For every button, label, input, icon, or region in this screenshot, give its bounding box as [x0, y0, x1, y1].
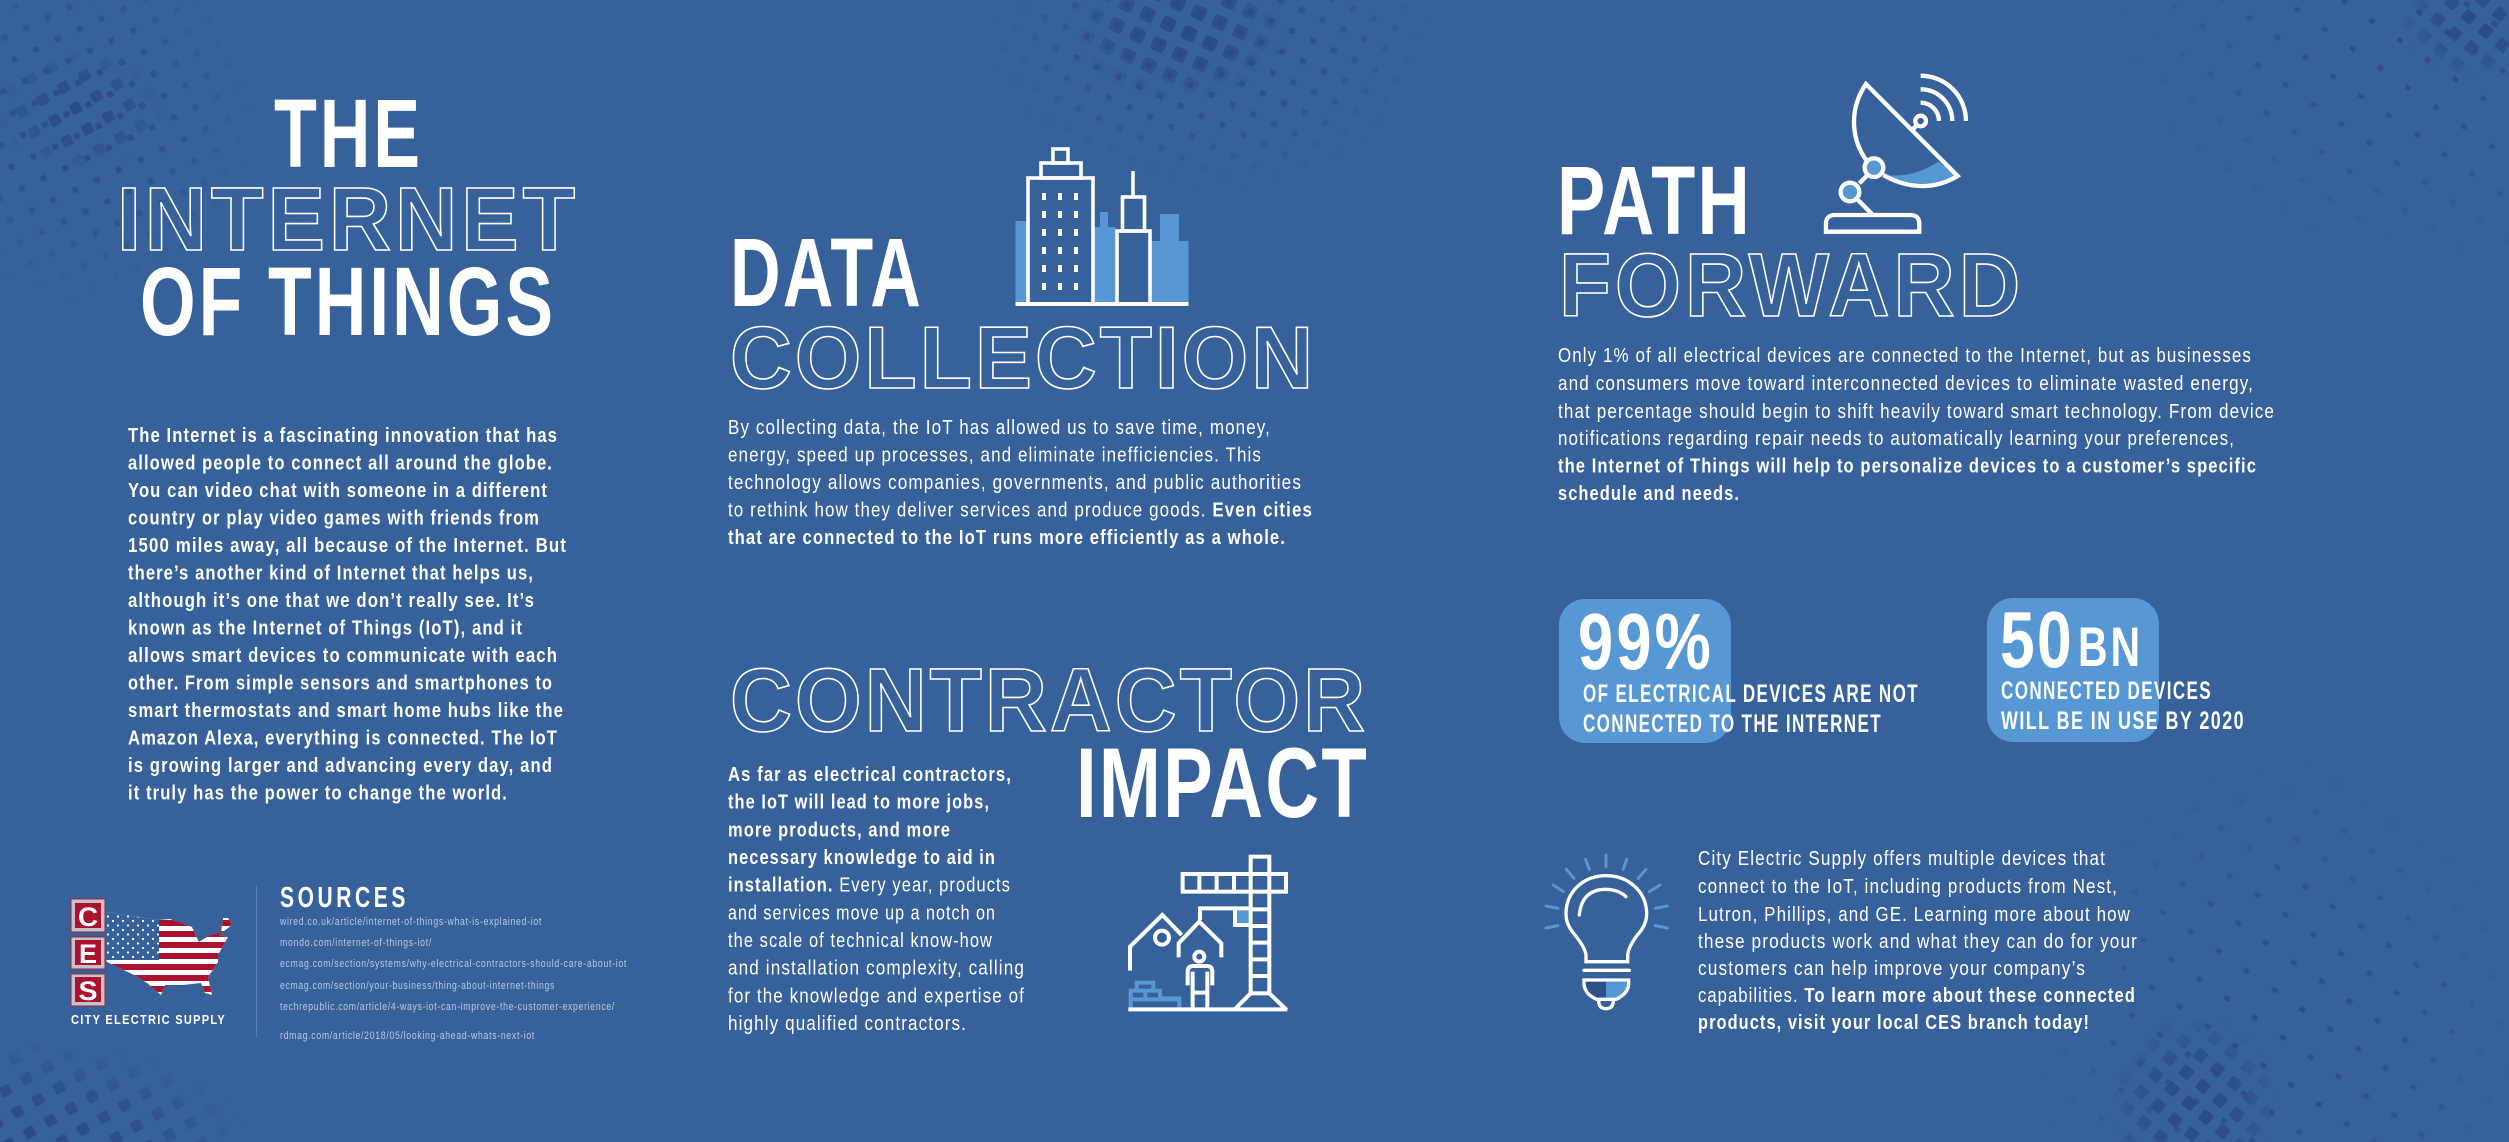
intro text block: is growing larger and advancing every day, and — [128, 755, 553, 777]
logo: City Electric Supply — [71, 899, 234, 1027]
intro text block: it truly has the power to change the world. — [128, 782, 508, 804]
title: The Internet of Things: OF THINGS — [140, 247, 556, 356]
sources list: techrepublic.com/article/4-ways-iot-can-improve-the-customer-experience/ — [280, 1001, 615, 1013]
logo letter E — [71, 937, 105, 969]
heading: Data Collection: COLLECTION — [730, 308, 1316, 407]
title: The Internet of Things: THE — [274, 79, 423, 188]
data collection text: energy, speed up processes, and eliminate inefficiencies. This — [728, 444, 1262, 466]
intro text block: other. From simple sensors and smartphones to — [128, 672, 553, 694]
icon: city skyline — [1016, 149, 1188, 306]
contractor text: more products, and more — [728, 819, 951, 841]
sources — [279, 882, 627, 1042]
stat caption — [2001, 677, 2245, 735]
CES offer text: products, visit your local CES branch today! — [1698, 1012, 2090, 1034]
path forward text: and consumers move toward interconnected devices to eliminate wasted energy, — [1558, 373, 2254, 395]
path forward text: Only 1% of all electrical devices are connected to the Internet, but as businesses — [1558, 345, 2252, 367]
sources list: mondo.com/internet-of-things-iot/ — [280, 937, 432, 949]
stat highlight box — [1559, 599, 1731, 743]
path forward text — [1558, 345, 2275, 505]
data collection text: technology allows companies, governments, and public authorities — [728, 472, 1302, 494]
logo letter C: C — [78, 902, 98, 932]
stat caption — [1583, 680, 1919, 738]
CES offer text: Lutron, Phillips, and GE. Learning more about how — [1698, 904, 2131, 926]
logo wordmark: CITY ELECTRIC SUPPLY — [71, 1013, 226, 1027]
stat highlight box — [1987, 598, 2159, 742]
intro text block: You can video chat with someone in a different — [128, 480, 548, 502]
heading: Contractor Impact: CONTRACTOR — [730, 651, 1368, 751]
CES offer text: City Electric Supply offers multiple devices that — [1698, 848, 2106, 870]
data collection text: By collecting data, the IoT has allowed us to save time, money, — [728, 417, 1271, 439]
intro text block: allowed people to connect all around the globe. — [128, 452, 553, 474]
title: The Internet of Things — [117, 79, 579, 356]
heading: Path Forward: PATH — [1557, 146, 1752, 255]
contractor text: As far as electrical contractors, — [728, 764, 1012, 786]
path forward text: the Internet of Things will help to personalize devices to a customer’s specific — [1558, 456, 2257, 478]
data collection text: to rethink how they deliver services and produce goods. Even cities — [728, 500, 1313, 522]
sources list: rdmag.com/article/2018/05/looking-ahead-whats-next-iot — [280, 1030, 535, 1042]
contractor text — [728, 764, 1025, 1035]
heading: Contractor Impact: IMPACT — [1076, 727, 1369, 838]
icon: satellite dish — [1826, 76, 1966, 232]
contractor text: necessary knowledge to aid in — [728, 847, 996, 869]
sources list — [279, 916, 627, 1042]
path forward text: notifications regarding repair needs to automatically learning your preferences, — [1558, 428, 2235, 450]
logo letter E: E — [79, 939, 97, 969]
contractor text: and services move up a notch on — [728, 902, 996, 924]
sources heading: SOURCES — [280, 882, 409, 914]
data collection text: that are connected to the IoT runs more efficiently as a whole. — [728, 527, 1286, 549]
heading: Data Collection — [730, 218, 1316, 407]
CES offer text: these products work and what they can do for your — [1698, 931, 2138, 953]
path forward text: that percentage should begin to shift heavily toward smart technology. From device — [1558, 401, 2275, 423]
logo letter C — [71, 899, 105, 932]
logo letter S — [71, 974, 105, 1006]
heading: Contractor Impact — [730, 651, 1369, 838]
CES offer text: capabilities. To learn more about these connected — [1698, 985, 2136, 1007]
heading: Path Forward — [1557, 146, 2024, 336]
intro text block: there’s another kind of Internet that helps us, — [128, 562, 534, 584]
sources list: ecmag.com/section/your-business/thing-about-internet-things — [280, 980, 555, 992]
intro text block: 1500 miles away, all because of the Internet. But — [128, 535, 567, 557]
heading: Data Collection: DATA — [730, 218, 923, 327]
stat caption: CONNECTED DEVICES — [2001, 677, 2212, 705]
title: The Internet of Things: INTERNET — [117, 170, 579, 270]
contractor text: highly qualified contractors. — [728, 1013, 967, 1035]
data collection text — [728, 417, 1313, 549]
stat: 50BN — [1987, 595, 2245, 742]
icon: US flag map — [102, 912, 232, 995]
intro text block: although it’s one that we don’t really see. It’s — [128, 590, 535, 612]
logo letter S: S — [78, 976, 98, 1006]
contractor text: installation. Every year, products — [728, 875, 1011, 897]
stat number: 50 — [2000, 595, 2074, 684]
stat caption: WILL BE IN USE BY 2020 — [2001, 707, 2245, 735]
intro text block: allows smart devices to communicate with each — [128, 645, 558, 667]
stat caption: CONNECTED TO THE INTERNET — [1583, 710, 1882, 738]
CES offer text: customers can help improve your company’s — [1698, 958, 2086, 980]
path forward text: schedule and needs. — [1558, 483, 1740, 505]
intro text block: Amazon Alexa, everything is connected. The IoT — [128, 728, 558, 750]
intro text block: The Internet is a fascinating innovation that has — [128, 425, 558, 447]
intro text block — [128, 425, 567, 804]
stat caption: OF ELECTRICAL DEVICES ARE NOT — [1583, 680, 1919, 708]
contractor text: the scale of technical know-how — [728, 930, 993, 952]
contractor text: the IoT will lead to more jobs, — [728, 792, 990, 814]
intro text block: country or play video games with friends from — [128, 508, 540, 530]
stat: 99% — [1559, 597, 1919, 743]
stat number: 99% — [1578, 597, 1714, 686]
contractor text: for the knowledge and expertise of — [728, 985, 1025, 1007]
contractor text: and installation complexity, calling — [728, 958, 1025, 980]
heading: Path Forward: FORWARD — [1559, 236, 2024, 336]
sources list: wired.co.uk/article/internet-of-things-what-is-explained-iot — [279, 916, 542, 928]
sources list: ecmag.com/section/systems/why-electrical-contractors-should-care-about-iot — [280, 958, 627, 970]
icon: light bulb — [1546, 855, 1667, 1009]
intro text block: smart thermostats and smart home hubs like the — [128, 700, 564, 722]
icon: construction crane and houses — [1128, 857, 1287, 1010]
intro text block: known as the Internet of Things (IoT), and it — [128, 618, 523, 640]
CES offer text — [1698, 848, 2138, 1034]
CES offer text: connect to the IoT, including products from Nest, — [1698, 876, 2118, 898]
stat unit: BN — [2078, 615, 2143, 678]
